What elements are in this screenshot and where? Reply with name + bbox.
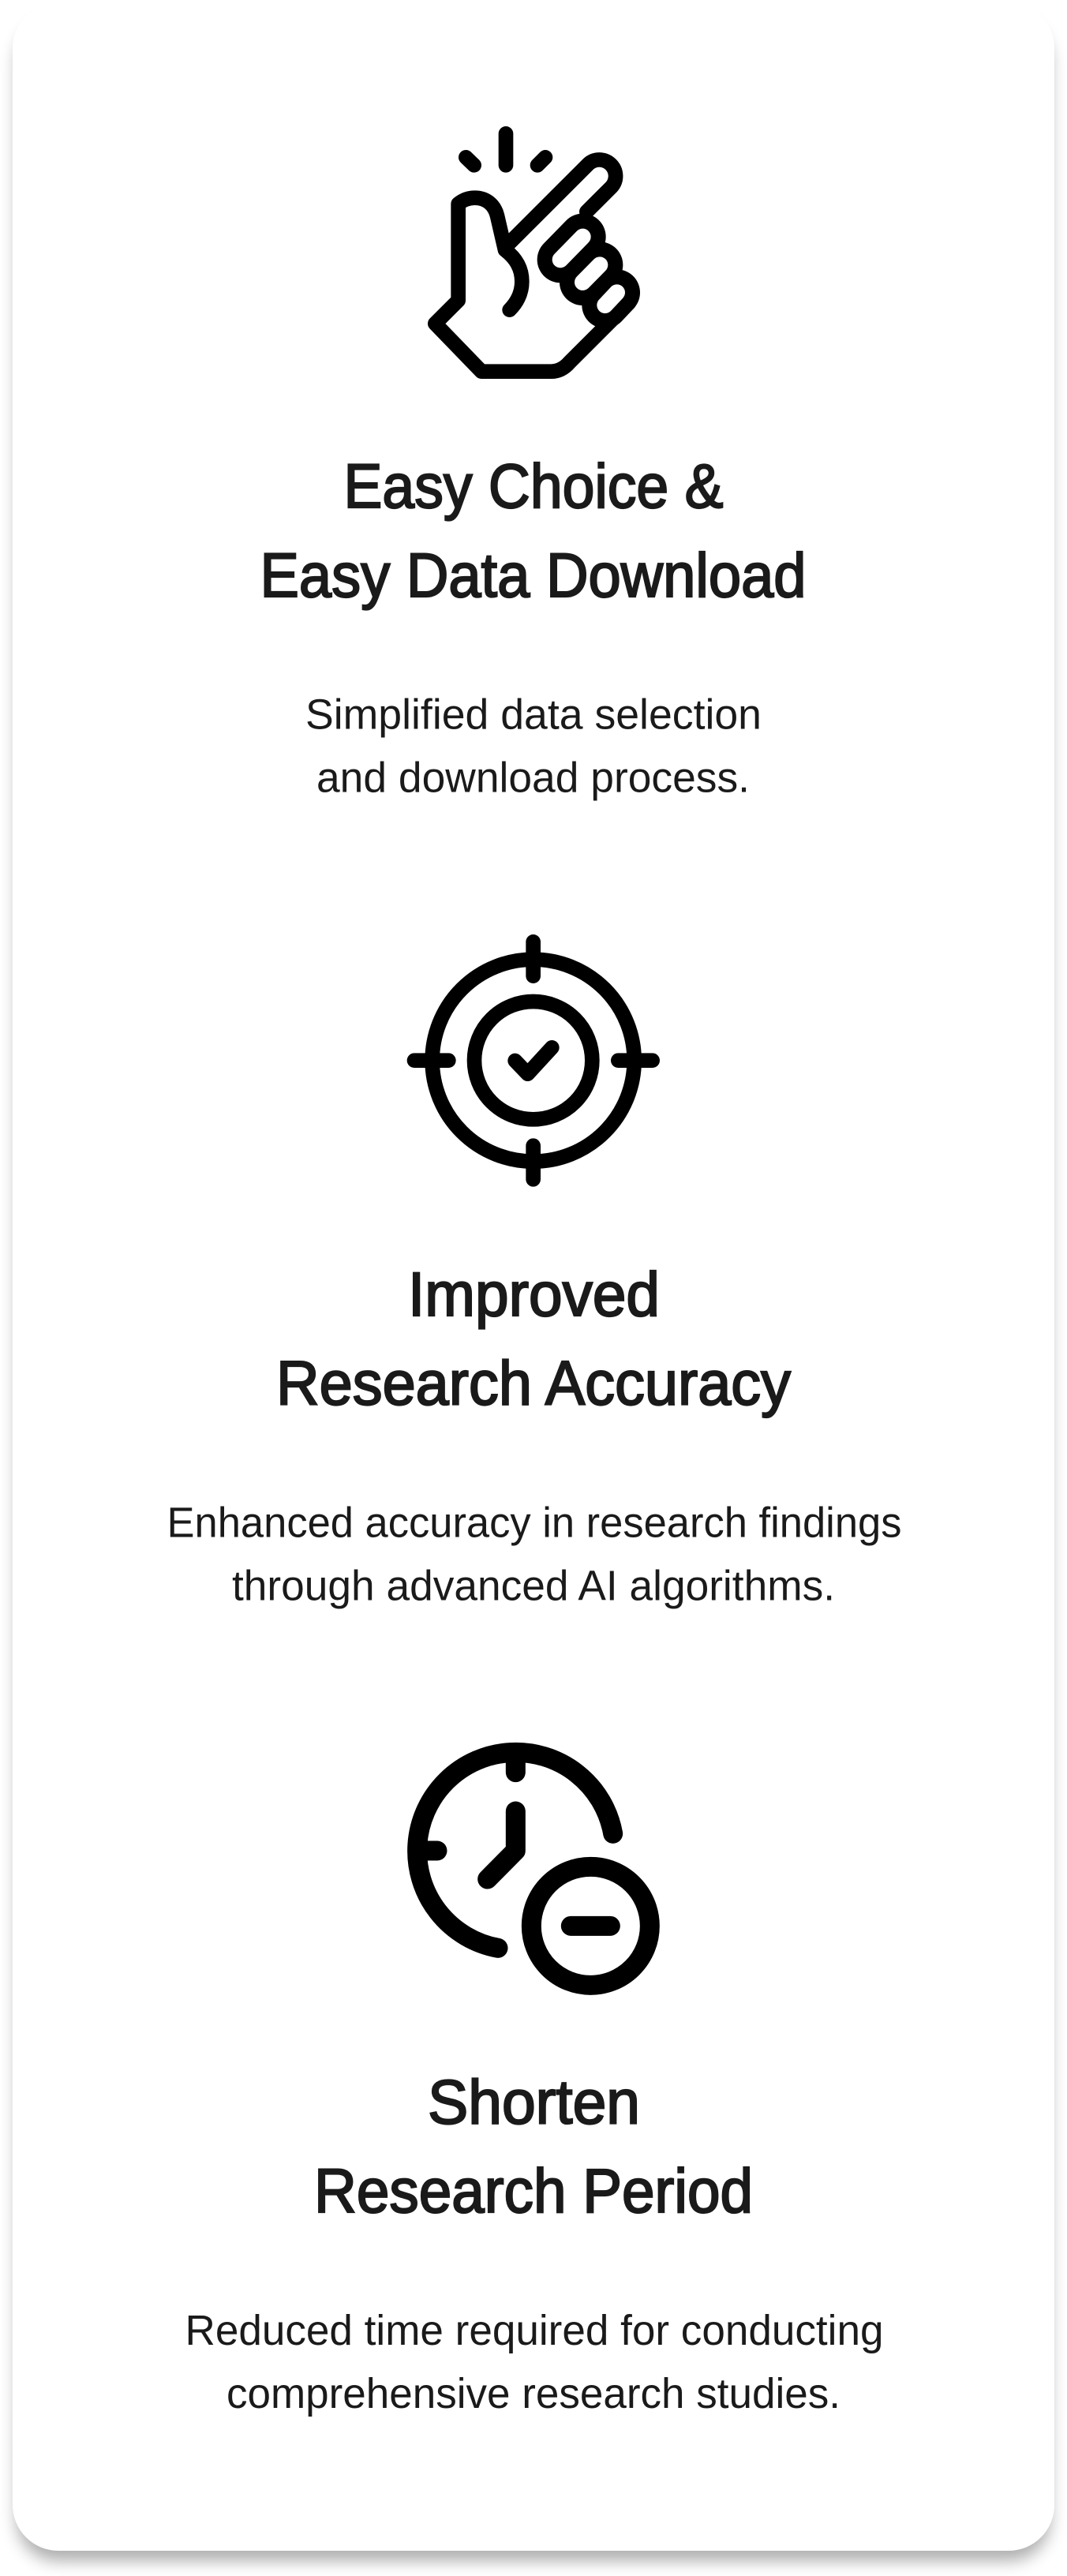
icon: snapping fingers hand [435, 133, 629, 372]
heading: easy choice and easy data download [260, 451, 807, 610]
section: improved research accuracy [167, 942, 901, 1610]
heading: improved research accuracy: Research Accuracy [276, 1348, 791, 1417]
description: reduced time [185, 2307, 884, 2417]
heading: shorten research period [314, 2066, 753, 2226]
description: enhanced accuracy [167, 1500, 901, 1610]
description: enhanced accuracy: through advanced AI algorithms. [232, 1563, 835, 1610]
heading: easy choice and easy data download: Easy Choice & [344, 451, 723, 521]
description: reduced time: comprehensive research studies. [227, 2370, 840, 2417]
description: simplified data selection: Simplified data selection [305, 691, 762, 739]
description: reduced time: Reduced time required for conducting [185, 2307, 884, 2354]
description: enhanced accuracy: Enhanced accuracy in research findings [167, 1500, 901, 1547]
heading: improved research accuracy: Improved [408, 1259, 660, 1329]
icon: clock with minus badge [417, 1752, 650, 1985]
icon: target crosshair with check mark [414, 942, 653, 1179]
description: simplified data selection: and download process. [316, 754, 750, 802]
description: simplified data selection [305, 691, 762, 802]
section: shorten research period [185, 1752, 884, 2417]
heading: easy choice and easy data download: Easy Data Download [260, 540, 807, 610]
heading: improved research accuracy [276, 1259, 791, 1417]
heading: shorten research period: Shorten [428, 2066, 640, 2137]
heading: shorten research period: Research Period [314, 2155, 753, 2226]
section: easy choice and data download [260, 133, 807, 802]
